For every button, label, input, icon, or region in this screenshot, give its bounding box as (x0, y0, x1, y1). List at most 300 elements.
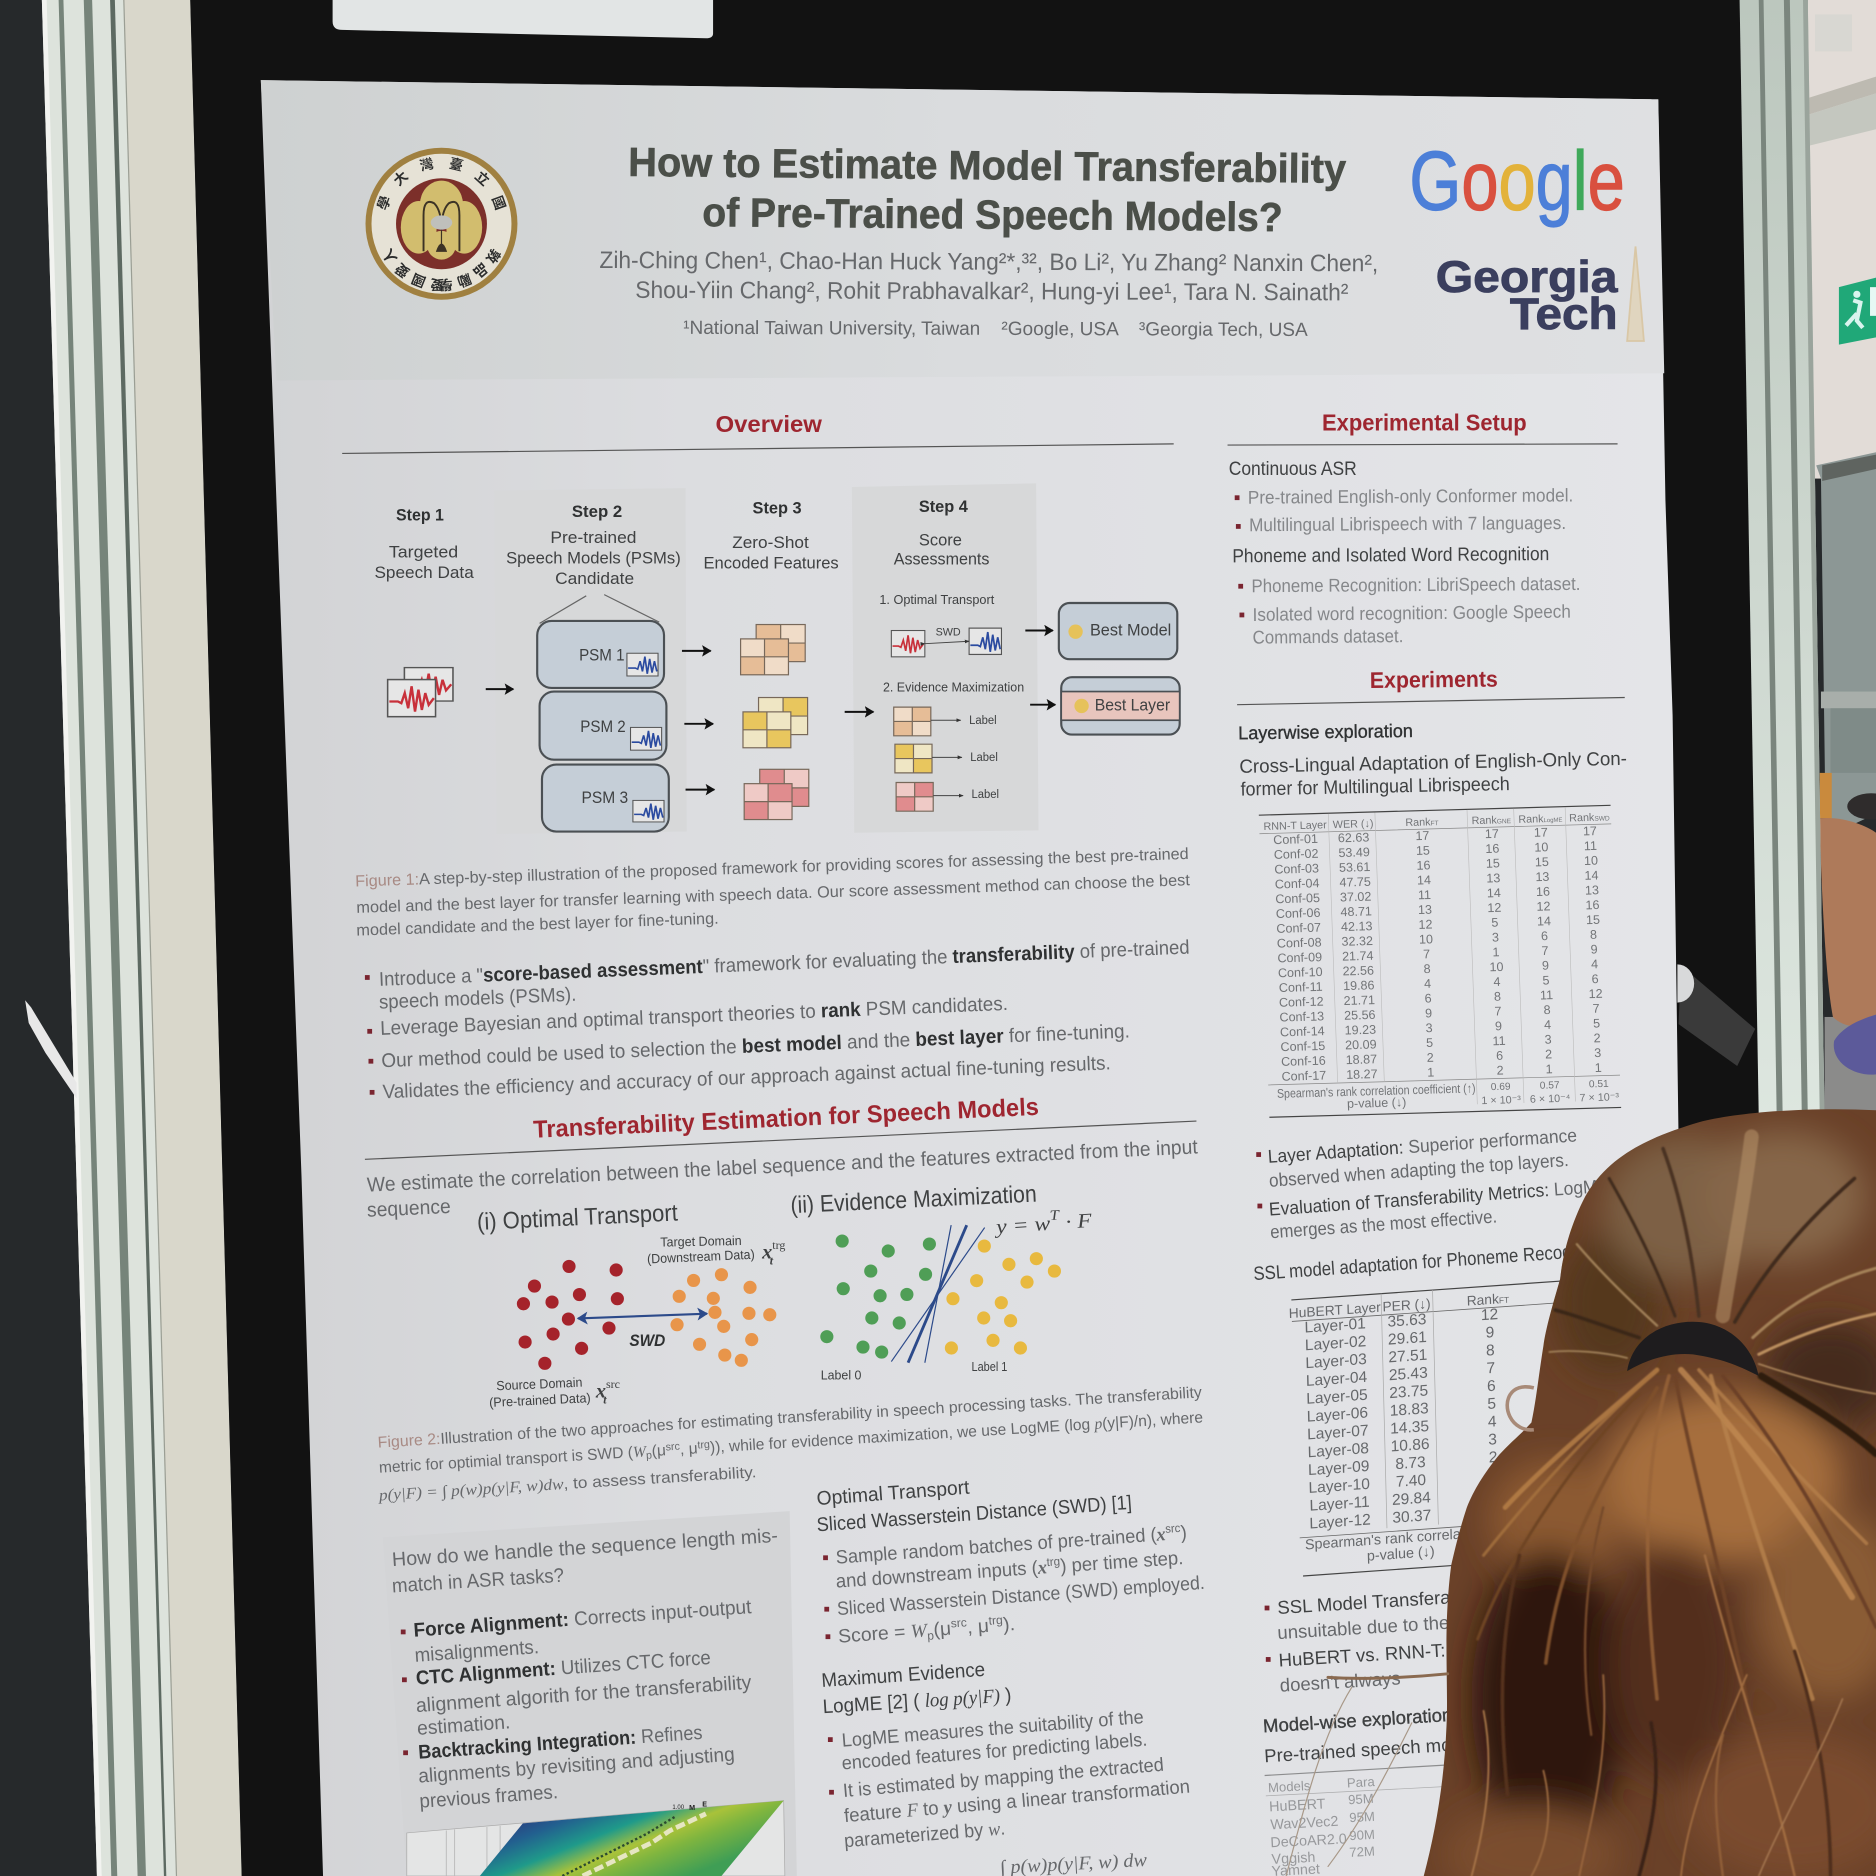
table: RNN-T layer ranks: 14 (1537, 914, 1551, 929)
step 4 background column (852, 483, 1038, 833)
icon: green exit sign (1839, 278, 1876, 345)
experimental setup text: Continuous ASR (1229, 459, 1357, 480)
heading: Experiments (1237, 666, 1625, 705)
table: RNN-T layer ranks: Conf-09 (1277, 950, 1322, 965)
table: RNN-T layer ranks: Conf-06 (1276, 906, 1321, 921)
table: HuBERT layer ranks: 25.43 (1389, 1365, 1428, 1384)
heading: Transferability Estimation (365, 1094, 1196, 1159)
table: model-wise comparison: HuBERT (1269, 1796, 1326, 1815)
heading: Overview: Overview (715, 411, 822, 437)
table: RNN-T layer ranks: 13 (1585, 883, 1599, 898)
table: model-wise comparison: Vggish (1271, 1850, 1316, 1868)
table: RNN-T layer ranks: 15 (1535, 855, 1549, 869)
table: RNN-T layer ranks: 15 (1586, 913, 1600, 927)
chart: alignment heatmap (407, 1801, 785, 1876)
table: RNN-T layer ranks: WER (↓) (1333, 818, 1374, 831)
heading: Overview (342, 411, 1174, 453)
table: RNN-T layer ranks: 53.61 (1339, 860, 1371, 875)
table: RNN-T layer ranks: 1 × 10⁻³ (1481, 1094, 1522, 1107)
methods text: optimal transport: Sample random batches of pre-trained (x (835, 1524, 1174, 1569)
model-wise exploration heading: Pre-trained speech models (1264, 1732, 1486, 1766)
figure 2 (i): optimal transport scatter: Target Domain (660, 1233, 742, 1250)
figure 2 caption: (μ (651, 1442, 666, 1460)
table: RNN-T layer ranks: 6 (1496, 1049, 1503, 1063)
panel: sequence length mismatch: CTC Alignment: Utilizes CTC force (415, 1647, 712, 1690)
logo: National Taiwan University seal: 立 (472, 168, 493, 189)
figure 2 (i): optimal transport scatter (476, 1199, 785, 1410)
methods text: optimal transport: Optimal Transport (816, 1477, 971, 1510)
step 2 labels (506, 502, 681, 588)
table: RNN-T layer ranks: 7 (1541, 944, 1549, 958)
table: RNN-T layer ranks: 9 (1590, 942, 1598, 957)
table: HuBERT layer ranks: 9 (1485, 1324, 1494, 1342)
figure 2 caption: , μ (680, 1440, 698, 1458)
figure 2 (i): optimal transport scatter: t (603, 1392, 607, 1406)
table: RNN-T layer ranks: 22.56 (1342, 964, 1374, 978)
table: RNN-T layer ranks: Conf-05 (1275, 891, 1320, 906)
table: RNN-T layer ranks: RNN-T Layer (1263, 819, 1327, 833)
methods text: optimal transport: src (1165, 1521, 1181, 1536)
table: RNN-T layer ranks: 16 (1585, 898, 1600, 912)
table: HuBERT layer ranks: 7.40 (1396, 1472, 1427, 1491)
table: RNN-T layer ranks: 4 (1424, 977, 1431, 991)
table: RNN-T layer ranks: 8 (1494, 990, 1501, 1004)
layerwise exploration heading (1238, 720, 1627, 801)
panel: sequence length mismatch: estimation. (416, 1711, 511, 1740)
figure 2 caption: p(y|F)/n), where (1094, 1409, 1205, 1433)
step 3 labels: Zero-Shot (732, 533, 809, 552)
table: RNN-T layer ranks: 11 (1492, 1034, 1506, 1048)
table: RNN-T layer ranks: 20.09 (1345, 1037, 1377, 1052)
decision boundary lines (891, 1225, 985, 1363)
table: RNN-T layer ranks: 19.86 (1343, 978, 1375, 993)
table: RNN-T layer ranks: Conf-07 (1276, 921, 1321, 936)
authors and affiliations: ¹National Taiwan University, Taiwan ²Google, USA ³Georgia Tech, USA (683, 318, 1308, 341)
table: RNN-T layer ranks: 17 (1583, 824, 1597, 838)
figure 2 (i): optimal transport scatter: x (596, 1380, 606, 1402)
figure 1 caption: Figure 1:A step-by-step illustration of the proposed framework for providing scores for assessing the best pre-trained (355, 845, 1189, 891)
step 2 background column (494, 488, 687, 834)
best model box: Best Model (1090, 620, 1171, 639)
table: HuBERT layer ranks: 8 (1486, 1342, 1495, 1360)
table: RNN-T layer ranks: 2 (1426, 1051, 1434, 1065)
logo: Georgia Tech (1436, 246, 1644, 341)
table: RNN-T layer ranks: Conf-14 (1280, 1024, 1325, 1039)
logo: National Taiwan University seal: 學 (438, 276, 453, 293)
table: RNN-T layer ranks: 6 (1591, 972, 1599, 986)
figure 2 (i): optimal transport scatter: (i) Optimal Transport (476, 1199, 679, 1236)
heading: Experiments: Experiments (1370, 666, 1498, 693)
title: How to Estimate Model Transferability (628, 139, 1347, 192)
table: RNN-T layer ranks: 19.23 (1344, 1023, 1376, 1038)
evidence maximization label rows: Label (970, 750, 998, 764)
optimal transport SWD waves (891, 626, 1001, 657)
overview bullet list: Validates the efficiency and accuracy of our approach against actual fine-tuning results. (382, 1052, 1111, 1103)
table: RNN-T layer ranks: 5 (1491, 916, 1499, 930)
table: RNN-T layer ranks: 7 (1494, 1004, 1502, 1019)
step 2 labels: Candidate (555, 569, 634, 588)
table: RNN-T layer ranks: 8 (1423, 962, 1431, 976)
methods text: optimal transport: trg (988, 1613, 1003, 1628)
table: RNN-T layer ranks: Conf-17 (1281, 1068, 1326, 1084)
evidence maximization label rows: Label (969, 713, 997, 727)
methods text: optimal transport: and downstream inputs (x (835, 1557, 1048, 1593)
panel: sequence length mismatch: Backtracking Integration: Refines (418, 1722, 703, 1764)
PSM 3 box (542, 765, 669, 832)
figure 2 caption: Figure 2:Illustration of the two approaches for estimating transferability in speech processing tasks. The transferability (377, 1384, 1202, 1452)
table: RNN-T layer ranks: 9 (1495, 1019, 1502, 1033)
table: HuBERT layer ranks: p-value (↓) (1367, 1544, 1435, 1565)
table: HuBERT layer ranks: Layer-12 (1309, 1511, 1371, 1533)
background person: dark hair (1847, 793, 1876, 820)
SSL model bullets: unsuitable due to their (1277, 1611, 1460, 1643)
table: RNN-T layer ranks: Conf-03 (1274, 861, 1319, 877)
figure 2 (ii): evidence maximization scatter: y = w (995, 1213, 1043, 1239)
table: HuBERT layer ranks: Layer-05 (1306, 1387, 1368, 1408)
candidate bracket lines (540, 595, 659, 623)
table: RNN-T layer ranks: 16 (1485, 842, 1500, 856)
methods text: optimal transport: ). (1002, 1614, 1016, 1636)
table: RNN-T layer ranks: 12 (1487, 901, 1502, 915)
table: RNN-T layer ranks: 3 (1425, 1021, 1433, 1035)
table: RNN-T layer ranks: 12 (1418, 917, 1433, 932)
SSL model bullets: HuBERT vs. RNN-T: (1278, 1639, 1446, 1671)
table: HuBERT layer ranks: Layer-06 (1307, 1404, 1368, 1426)
table: RNN-T layer ranks: 53.49 (1338, 845, 1370, 860)
logo: National Taiwan University seal: 大 (390, 168, 411, 189)
table: RNN-T layer ranks: 2 (1545, 1047, 1552, 1062)
poster sheet (261, 80, 1705, 1876)
overview bullet list: Our method could be used to selection the best model and the best layer for fine-tuning. (381, 1020, 1130, 1072)
step 2 labels: Speech Models (PSMs) (506, 549, 681, 568)
arrow to best layer (1030, 704, 1055, 706)
logo: National Taiwan University seal: 臺 (448, 156, 465, 174)
figure 2 (i): optimal transport scatter: (Pre-trained Data) (489, 1390, 591, 1410)
experimental setup text: Phoneme and Isolated Word Recognition (1232, 544, 1549, 567)
paper note above poster (333, 0, 713, 38)
table: HuBERT layer ranks: RankFT (1467, 1291, 1509, 1309)
table: RNN-T layer ranks: 4 (1591, 957, 1598, 971)
table: RNN-T layer ranks: 7 (1592, 1002, 1600, 1016)
table: RNN-T layer ranks (1259, 805, 1621, 1117)
table: HuBERT layer ranks: Layer-04 (1306, 1369, 1368, 1390)
figure 2 caption: p(y|F) = ∫ p(w)p(y|F, w)dw , to assess transferability. (377, 1464, 757, 1504)
methods text: optimal transport: trg (1046, 1554, 1060, 1569)
table: HuBERT layer ranks: Layer-07 (1307, 1422, 1369, 1444)
table: HuBERT layer ranks: Layer-09 (1308, 1458, 1370, 1479)
table: RNN-T layer ranks: RankLogME (1518, 813, 1563, 826)
table: RNN-T layer ranks: 6 (1424, 992, 1432, 1006)
logo: National Taiwan University seal: 國 (410, 271, 428, 290)
table: RNN-T layer ranks: 2 (1496, 1064, 1504, 1078)
step 4 labels: 1. Optimal Transport (879, 592, 995, 607)
step 4 labels: Assessments (894, 550, 989, 569)
table: HuBERT layer ranks: 30.37 (1392, 1507, 1432, 1527)
table: RNN-T layer ranks: 6 (1541, 929, 1548, 943)
evidence maximization label rows: Label (972, 787, 999, 801)
table: RNN-T layer ranks: 1 (1594, 1061, 1602, 1075)
methods text: optimal transport: ) (1180, 1523, 1188, 1544)
figure 2 (i): optimal transport scatter: Source Domain (496, 1375, 583, 1393)
table: model-wise comparison: 72M (1349, 1844, 1375, 1860)
table: RNN-T layer ranks: 1 (1492, 945, 1500, 959)
methods text: maximum evidence: It is estimated by mapping the extracted (842, 1755, 1165, 1802)
authors and affiliations: Zih-Ching Chen¹, Chao-Han Huck Yang²*,³², Bo Li², Yu Zhang² Nanxin Chen², (599, 247, 1378, 277)
step 4 labels: Step 4 (919, 497, 969, 516)
table: HuBERT layer ranks: 7 (1486, 1360, 1495, 1377)
logo: National Taiwan University seal: 敦 (483, 246, 504, 266)
SWD double arrow (578, 1314, 707, 1318)
right display frame (1740, 0, 1825, 1116)
table: RNN-T layer ranks: 0.69 (1491, 1082, 1511, 1093)
table: RNN-T layer ranks: 8 (1590, 928, 1597, 942)
table: RNN-T layer ranks: 10 (1534, 840, 1549, 855)
methods text: maximum evidence: LogME [2] ( log p(y|F) ) (822, 1684, 1012, 1718)
panel: sequence length mismatch: How do we handle the sequence length mis- (391, 1525, 778, 1571)
table: RNN-T layer ranks: 13 (1535, 870, 1550, 884)
table: HuBERT layer ranks: Layer-01 (1304, 1315, 1366, 1337)
table: RNN-T layer ranks: 5 (1542, 973, 1550, 988)
title: of Pre-Trained Speech Models? (702, 189, 1283, 240)
table: RNN-T layer ranks: 6 × 10⁻⁴ (1530, 1093, 1571, 1106)
table: HuBERT layer ranks (1288, 1280, 1581, 1577)
figure 2 (ii): evidence maximization scatter: · F (1059, 1210, 1093, 1234)
tape on poster corner (1677, 964, 1755, 1066)
figure 1 caption: model and the best layer for transfer learning with speech data. Our score assessment method can choose the best (356, 871, 1191, 917)
table: RNN-T layer ranks: 11 (1418, 888, 1431, 902)
table: RNN-T layer ranks: 13 (1418, 903, 1432, 917)
logo: National Taiwan University seal: 品 (470, 260, 491, 280)
figure 2 caption: p (646, 1450, 652, 1462)
methods text: optimal transport (816, 1477, 1205, 1649)
layer adaptation bullets: Layer Adaptation: Superior performance (1267, 1124, 1578, 1167)
logo: National Taiwan University seal: 勵 (455, 271, 473, 290)
table: RNN-T layer ranks: 37.02 (1340, 890, 1372, 904)
layerwise exploration heading: Layerwise exploration (1238, 720, 1413, 743)
loose hair strands on poster (1286, 1674, 1448, 1876)
figure 2 (i): optimal transport scatter: (Downstream Data) (647, 1247, 755, 1266)
table: RNN-T layer ranks: 3 (1544, 1033, 1552, 1047)
table: RNN-T layer ranks: 5 (1426, 1036, 1433, 1050)
PSM 2 box: PSM 2 (580, 717, 626, 736)
table: HuBERT layer ranks: 12 (1481, 1306, 1498, 1324)
chart: alignment heatmap: E (702, 1801, 707, 1809)
methods text: maximum evidence: encoded features for predicting labels. (841, 1730, 1148, 1775)
table: RNN-T layer ranks: 17 (1534, 825, 1548, 840)
table: model-wise comparison: Models (1268, 1778, 1311, 1795)
table: model-wise comparison: 90M (1349, 1827, 1375, 1843)
overview bullet list: Leverage Bayesian and optimal transport theories to rank PSM candidates. (380, 993, 1008, 1040)
SWD label: SWD (629, 1331, 665, 1350)
SSL model adaptation heading: SSL model adaptation for Phoneme Recognition (1253, 1239, 1612, 1285)
table: RNN-T layer ranks: RankGNE (1471, 814, 1511, 827)
table: HuBERT layer ranks: Layer-10 (1308, 1476, 1370, 1497)
table: RNN-T layer ranks: Conf-13 (1279, 1009, 1324, 1025)
logo: National Taiwan University seal: 灣 (418, 156, 436, 174)
table: model-wise comparison: DeCoAR2.0 (1270, 1831, 1347, 1851)
figure 2 (ii): evidence maximization scatter: Label 0 (821, 1367, 861, 1382)
table: RNN-T layer ranks: RankSWD (1569, 812, 1610, 824)
logo: National Taiwan University seal: 學 (374, 193, 394, 212)
experimental setup text (1229, 459, 1581, 648)
table: RNN-T layer ranks: 14 (1417, 873, 1431, 887)
layer adaptation bullets (1256, 1124, 1610, 1242)
table: RNN-T layer ranks: 7 × 10⁻³ (1579, 1091, 1620, 1104)
logo: National Taiwan University seal: 愛 (430, 276, 445, 293)
figure 2 (ii): evidence maximization scatter (790, 1181, 1093, 1382)
table: RNN-T layer ranks: Spearman's rank correlation coefficient (↑) (1277, 1081, 1476, 1101)
step 4 labels: 2. Evidence Maximization (883, 680, 1024, 695)
table: RNN-T layer ranks: 2 (1593, 1031, 1601, 1045)
table: HuBERT layer ranks: 29.84 (1392, 1489, 1431, 1509)
table: RNN-T layer ranks: 47.75 (1339, 875, 1371, 890)
best layer box (1061, 677, 1180, 735)
arrow: features to assessment (845, 711, 873, 713)
table: RNN-T layer ranks: 48.71 (1340, 904, 1372, 919)
experimental setup text: Commands dataset. (1252, 625, 1403, 648)
table: RNN-T layer ranks: 1 (1545, 1062, 1553, 1076)
model-wise exploration heading (1262, 1704, 1486, 1766)
table: RNN-T layer ranks: 14 (1584, 868, 1599, 883)
experimental setup text: Isolated word recognition: Google Speech (1252, 601, 1571, 625)
poster header band (261, 80, 1664, 380)
best model box (1059, 603, 1177, 659)
methods text: optimal transport: ) per time step. (1060, 1548, 1184, 1577)
layer adaptation bullets: Evaluation of Transferability Metrics: LogME (1268, 1175, 1610, 1220)
table: RNN-T layer ranks: 15 (1486, 856, 1500, 871)
panel: sequence length mismatch: match in ASR tasks? (391, 1565, 565, 1597)
panel: sequence length mismatch (383, 1511, 797, 1876)
figure 2 caption: )), while for evidence maximization, we use LogME (log (709, 1416, 1095, 1457)
background person: bald head (1820, 818, 1876, 1026)
heading: Transferability Estimation: Transferability Estimation for Speech Models (533, 1094, 1039, 1144)
table: RNN-T layer ranks: 17 (1485, 827, 1499, 841)
figure 2 caption (377, 1384, 1204, 1504)
table: HuBERT layer ranks: 35.63 (1387, 1311, 1427, 1331)
table: RNN-T layer ranks: Conf-12 (1279, 995, 1324, 1010)
table: model-wise comparison: 95M (1348, 1791, 1374, 1807)
figure 2 caption: src (665, 1441, 681, 1453)
experimental setup text: Pre-trained English-only Conformer model. (1248, 484, 1573, 508)
methods text: optimal transport: src (950, 1615, 967, 1630)
table: RNN-T layer ranks: 1 (1427, 1065, 1434, 1080)
logo: National Taiwan University seal (368, 151, 514, 297)
methods text: optimal transport: Score = W (838, 1620, 927, 1648)
panel: sequence length mismatch: misalignments. (414, 1636, 540, 1667)
table: RNN-T layer ranks: 42.13 (1341, 919, 1373, 934)
table: RNN-T layer ranks: 10 (1419, 932, 1433, 947)
section intro text: sequence (367, 1196, 451, 1222)
authors and affiliations: Shou-Yiin Chang², Rohit Prabhavalkar², Hung-yi Lee¹, Tara N. Sainath² (635, 277, 1348, 306)
table: HuBERT layer ranks: Spearman's rank correlation (1305, 1525, 1484, 1553)
step 2 labels: Pre-trained (550, 528, 637, 547)
overview bullet list (365, 937, 1190, 1103)
orange encoded features (741, 625, 805, 675)
table: model-wise comparison (1265, 1765, 1451, 1876)
table: RNN-T layer ranks: Conf-16 (1281, 1054, 1326, 1069)
table: RNN-T layer ranks: 14 (1487, 886, 1501, 900)
logo: Georgia Tech: Georgia (1436, 253, 1618, 302)
figure 2 (ii): evidence maximization scatter: Label 1 (972, 1359, 1007, 1374)
table: RNN-T layer ranks: 10 (1489, 960, 1504, 974)
PSM 1 box (537, 621, 664, 688)
step 1 labels: Targeted (389, 543, 458, 562)
table: RNN-T layer ranks: Conf-10 (1278, 965, 1323, 980)
table: RNN-T layer ranks: 5 (1593, 1016, 1600, 1031)
table: RNN-T layer ranks: p-value (↓) (1347, 1095, 1407, 1111)
experimental setup text: Multilingual Librispeech with 7 languages. (1249, 512, 1566, 535)
table: RNN-T layer ranks: 16 (1536, 885, 1550, 899)
table: RNN-T layer ranks: 4 (1493, 975, 1501, 989)
SSL model bullets (1265, 1584, 1493, 1696)
foreground: hair of attendee (1286, 1109, 1876, 1876)
figure 2 caption: trg (697, 1439, 710, 1452)
figure 2 (i): optimal transport scatter: src (606, 1377, 620, 1391)
table: RNN-T layer ranks: Conf-04 (1275, 876, 1320, 891)
methods text: optimal transport: , μ (966, 1616, 990, 1638)
figure 1 caption (355, 845, 1191, 940)
table: HuBERT layer ranks: 8.73 (1395, 1454, 1426, 1473)
table: RNN-T layer ranks: Conf-02 (1274, 847, 1319, 862)
overview bullet list: speech models (PSMs). (379, 984, 577, 1014)
table: RNN-T layer ranks: 21.74 (1342, 949, 1374, 964)
table: RNN-T layer ranks: 18.27 (1346, 1067, 1378, 1082)
logo: National Taiwan University seal: 國 (489, 194, 508, 212)
table: RNN-T layer ranks: 62.63 (1338, 830, 1370, 845)
figure 2 (i): optimal transport scatter: trg (772, 1238, 785, 1252)
authors and affiliations (599, 247, 1378, 341)
SSL model bullets: doesn't always (1279, 1667, 1401, 1696)
experimental setup text: Phoneme Recognition: LibriSpeech dataset. (1251, 573, 1581, 596)
target domain dots (670, 1268, 776, 1367)
logo: National Taiwan University seal: 愛 (392, 260, 413, 281)
table: HuBERT layer ranks: 27.51 (1388, 1347, 1428, 1366)
figure 2 caption: metric for optimial transport is SWD (W (378, 1443, 647, 1477)
table: RNN-T layer ranks: 4 (1544, 1018, 1551, 1032)
chart: alignment heatmap: M (689, 1804, 695, 1812)
label 1 dots (945, 1240, 1061, 1355)
figure 1: step by step framework (374, 483, 1180, 834)
table: HuBERT layer ranks: HuBERT Layer (1289, 1300, 1381, 1321)
figure 2 (ii): evidence maximization scatter: T (1049, 1207, 1061, 1224)
evidence maximization label rows (894, 707, 999, 811)
step 3 labels (704, 498, 839, 572)
arrow: data to PSMs (486, 688, 513, 690)
white torn scrap on left wall (25, 1000, 77, 1098)
right side hall background (1808, 0, 1876, 1125)
left display frame (42, 0, 242, 1876)
PSM 3 box: PSM 3 (581, 788, 628, 807)
overview bullet list: Introduce a "score-based assessment" framework for evaluating the transferability of pre-trained (379, 937, 1190, 991)
table: RNN-T layer ranks: 16 (1416, 858, 1431, 873)
table: RNN-T layer ranks: 21.71 (1343, 993, 1375, 1008)
arrows: PSMs to features (682, 651, 714, 790)
heading: Experimental Setup: Experimental Setup (1322, 410, 1527, 436)
table: RNN-T layer ranks: 9 (1542, 959, 1549, 973)
table: RNN-T layer ranks: 15 (1416, 844, 1430, 858)
table: RNN-T layer ranks: 18.87 (1345, 1052, 1377, 1067)
table: HuBERT layer ranks: 18.83 (1390, 1400, 1429, 1420)
table: HuBERT layer ranks: 14.35 (1390, 1418, 1429, 1438)
table: RNN-T layer ranks: Conf-15 (1280, 1039, 1325, 1054)
table: model-wise comparison: 95M (1349, 1809, 1375, 1825)
layer adaptation bullets: emerges as the most effective. (1269, 1205, 1498, 1242)
best layer box: Best Layer (1095, 696, 1170, 715)
table: HuBERT layer ranks: 2 (1489, 1449, 1498, 1467)
step 1 speech waveforms (388, 668, 453, 717)
table: RNN-T layer ranks: 11 (1540, 988, 1553, 1002)
table: RNN-T layer ranks: 8 (1543, 1003, 1551, 1017)
